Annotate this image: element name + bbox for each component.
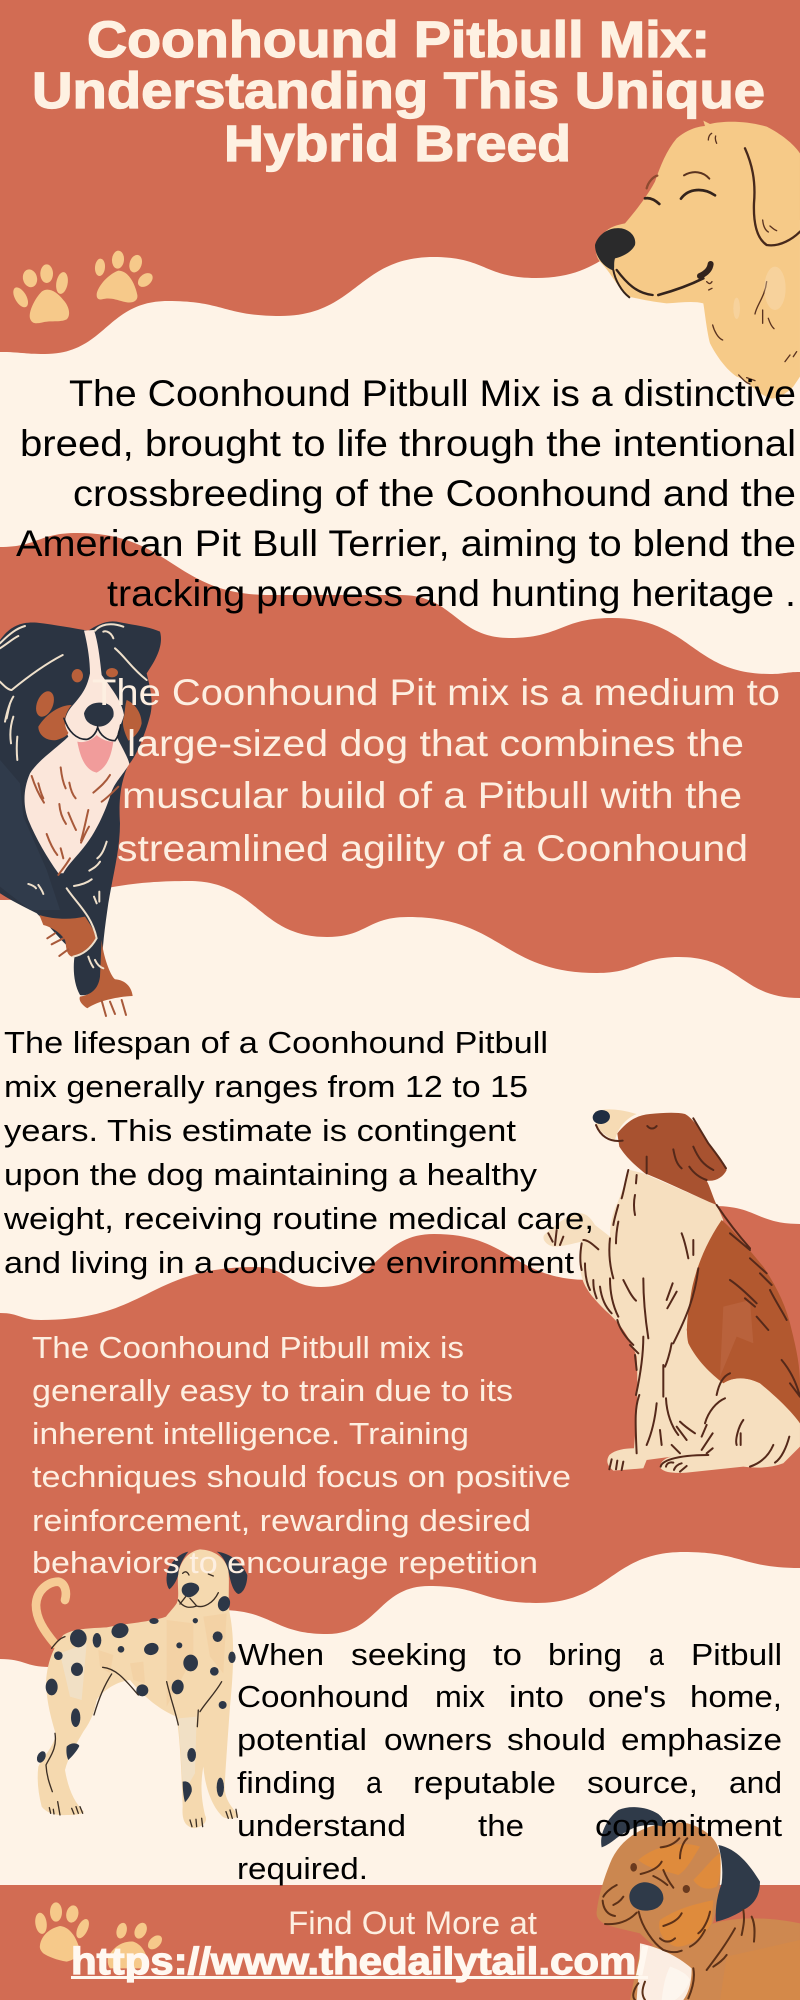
text block: size and build: streamlined agility of a Coonhound [117, 828, 748, 869]
text block: finding a source: a [649, 1637, 665, 1672]
text block: introduction [16, 373, 796, 614]
title: Coonhound Pitbull Mix: [87, 11, 710, 68]
illustration: brown mastiff dog [597, 1807, 800, 2000]
footer band [0, 1885, 800, 2000]
text block: finding a source: home, [690, 1679, 782, 1714]
text block: finding a source: Pitbull [691, 1637, 782, 1672]
text block: lifespan: weight, receiving routine medical care, [3, 1201, 594, 1236]
footer call to action: https://www.thedailytail.com/ [71, 1941, 648, 1983]
icon: paw prints top left [10, 250, 155, 323]
text block: introduction: tracking prowess and hunting heritage . [107, 573, 796, 614]
text block: finding a source: should [507, 1722, 606, 1757]
text block: finding a source: commitment [595, 1808, 782, 1843]
text block: training: reinforcement, rewarding desired [32, 1503, 531, 1538]
text block: lifespan [3, 1025, 594, 1280]
text block: lifespan: The lifespan of a Coonhound Pitbull [4, 1025, 548, 1060]
text block: finding a source: emphasize [621, 1722, 782, 1757]
text block: finding a source: When [238, 1637, 324, 1672]
text block: lifespan: upon the dog maintaining a healthy [4, 1157, 538, 1192]
text block: introduction: crossbreeding of the Coonhound and the [73, 473, 796, 514]
text block: finding a source: one's [588, 1679, 666, 1714]
title: Hybrid Breed [224, 115, 571, 172]
illustration: sitting brown and cream dog [543, 1109, 800, 1473]
text block: finding a source [237, 1637, 782, 1886]
text block: lifespan: and living in a conducive environment [4, 1245, 574, 1280]
text block: introduction: The Coonhound Pitbull Mix is a distinctive [69, 373, 796, 414]
third wave band [0, 1206, 800, 1667]
text block: finding a source: reputable [413, 1765, 556, 1800]
icon: paw prints footer [34, 1902, 165, 1968]
text block: finding a source: source, [587, 1765, 698, 1800]
text block: lifespan: mix generally ranges from 12 to 15 [4, 1069, 528, 1104]
text block: introduction: American Pit Bull Terrier, aiming to blend the [16, 523, 796, 564]
top wave band [0, 0, 800, 354]
text block: finding a source: Coonhound [237, 1679, 409, 1714]
text block: size and build [92, 672, 780, 869]
text block: finding a source: finding [237, 1765, 336, 1800]
text block: training [32, 1330, 571, 1580]
text block: finding a source: the [478, 1808, 524, 1843]
illustration: dalmatian dog [35, 1549, 247, 1828]
text block: finding a source: into [509, 1679, 564, 1714]
text block: finding a source: mix [435, 1679, 486, 1714]
text block: size and build: large-sized dog that combines the [127, 723, 744, 764]
text block: training: generally easy to train due to its [32, 1373, 513, 1408]
illustration: Bernese mountain dog [0, 621, 161, 1016]
text block: finding a source: required. [237, 1851, 368, 1886]
text block: training: inherent intelligence. Training [32, 1416, 469, 1451]
text block: finding a source: owners [384, 1722, 492, 1757]
text block: size and build: The Coonhound Pit mix is a medium to [92, 672, 780, 713]
text block: training: The Coonhound Pitbull mix is [32, 1330, 464, 1365]
text block: size and build: muscular build of a Pitbull with the [122, 775, 742, 816]
footer call to action: Find Out More at [288, 1905, 537, 1941]
text block: lifespan: years. This estimate is contingent [4, 1113, 516, 1148]
text block: introduction: breed, brought to life through the intentional [20, 423, 796, 464]
illustration: golden dog head [595, 121, 800, 399]
text block: finding a source: understand [237, 1808, 406, 1843]
text block: finding a source: a [366, 1765, 383, 1800]
text block: finding a source: potential [237, 1722, 367, 1757]
title [32, 11, 765, 172]
text block: finding a source: seeking [351, 1637, 467, 1672]
footer call to action [71, 1905, 648, 1983]
title: Understanding This Unique [32, 62, 765, 119]
text block: finding a source: to [493, 1637, 522, 1672]
text block: finding a source: bring [548, 1637, 622, 1672]
text block: training: techniques should focus on positive [32, 1459, 571, 1494]
text block: finding a source: and [729, 1765, 782, 1800]
text block: training: behaviors to encourage repetition [32, 1545, 538, 1580]
second wave band [0, 533, 800, 998]
